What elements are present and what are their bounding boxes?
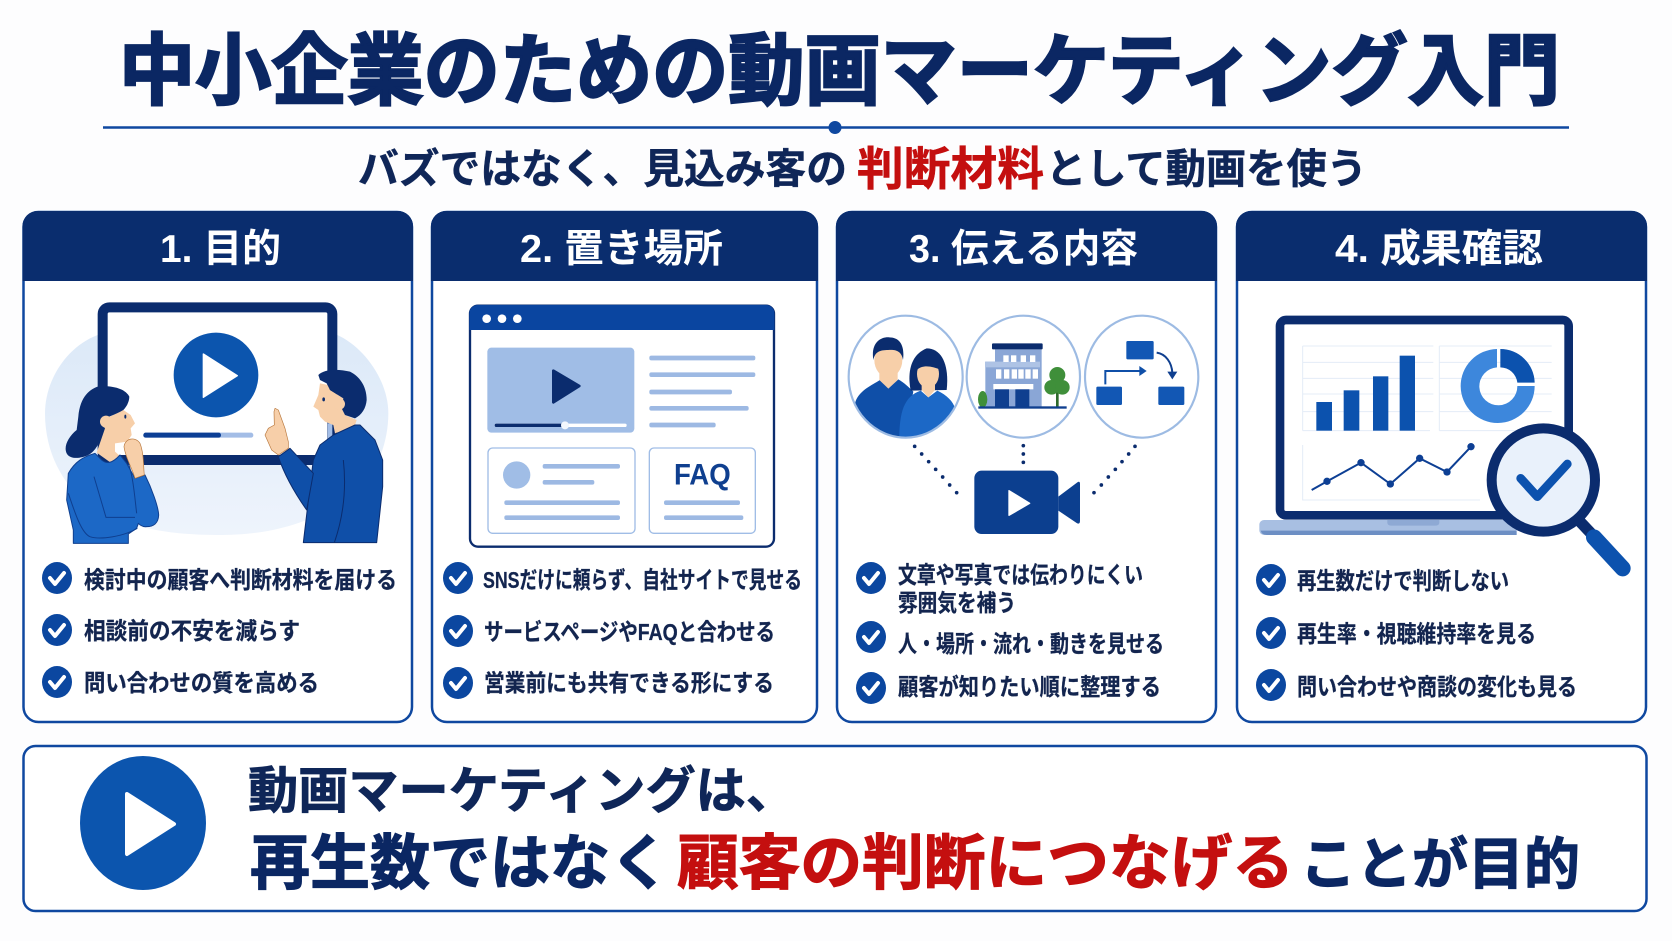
circle: people: [849, 316, 963, 440]
illustration: web page with video and FAQ: [469, 305, 774, 547]
bullet text: 人・場所・流れ・動きを見せる: [898, 631, 1164, 657]
icon: magnifier with check: [1492, 428, 1623, 568]
callout text line 2: ことが目的: [1300, 833, 1580, 896]
check icon: [443, 562, 473, 594]
panel header: [431, 211, 818, 281]
icon: play button: [80, 756, 206, 890]
panel heading: 2. 置き場所: [520, 228, 723, 271]
panel: 3. 伝える内容: [836, 211, 1217, 722]
line chart: [1303, 443, 1480, 500]
circle: building: [967, 316, 1080, 438]
bullet text: [898, 562, 1143, 616]
check icon: [42, 614, 72, 646]
callout text line 1: 動画マーケティングは、: [248, 763, 796, 819]
illustration: couple watching video: [45, 307, 388, 543]
check icon: [443, 667, 473, 699]
bullet text: 再生数だけで判断しない: [1297, 568, 1509, 594]
check icon: [42, 562, 72, 594]
bullet text: サービスページやFAQと合わせる: [484, 619, 775, 645]
bullet text: 営業前にも共有できる形にする: [484, 670, 774, 696]
woman: [66, 386, 159, 543]
bullet text: 相談前の不安を減らす: [84, 618, 300, 644]
panel header: [1236, 211, 1647, 281]
circle: flow chart: [1085, 316, 1198, 438]
check icon: [856, 672, 886, 704]
bullet text: 問い合わせの質を高める: [84, 670, 319, 696]
panel: 4. 成果確認: [1236, 211, 1647, 722]
icon: video camera: [974, 471, 1080, 534]
panel header: [836, 211, 1217, 281]
check icon: [1256, 669, 1286, 701]
bullet text: SNSだけに頼らず、自社サイトで見せる: [483, 567, 802, 593]
callout text line 2: 再生数ではなく: [250, 830, 670, 897]
bullet list: [443, 562, 802, 699]
bar chart: [1303, 346, 1433, 431]
panel heading: 4. 成果確認: [1335, 228, 1543, 271]
title: 中小企業のための動画マーケティング入門: [119, 27, 1560, 115]
subtitle: 判断材料: [857, 143, 1044, 195]
check icon: [42, 666, 72, 698]
bullet list: [1256, 564, 1577, 701]
panel heading: 1. 目的: [160, 228, 281, 271]
check icon: [443, 615, 473, 647]
check icon: [856, 562, 886, 594]
bullet text: 検討中の顧客へ判断材料を届ける: [84, 567, 397, 593]
bullet text: 問い合わせや商談の変化も見る: [1297, 674, 1577, 700]
callout text line 2: [250, 830, 1580, 897]
bullet text: 文章や写真では伝わりにくい: [898, 562, 1143, 588]
bullet list: [42, 562, 397, 698]
check icon: [856, 621, 886, 653]
illustration: laptop analytics and magnifier: [1259, 320, 1623, 568]
subtitle: バズではなく、見込み客の: [358, 146, 847, 192]
callout: conclusion: [24, 746, 1646, 911]
man: [265, 370, 383, 543]
title rule with dot: [103, 121, 1569, 134]
panel: 1. 目的: [22, 211, 413, 722]
illustration: web page with video and FAQ: FAQ: [674, 459, 731, 492]
callout text line 2: 顧客の判断につなげる: [677, 830, 1294, 897]
panel heading: 3. 伝える内容: [909, 228, 1138, 271]
bullet text: 再生率・視聴維持率を見る: [1297, 621, 1536, 647]
check icon: [1256, 564, 1286, 596]
panel: 2. 置き場所: [431, 211, 818, 722]
bullet list: [856, 562, 1164, 704]
check icon: [1256, 617, 1286, 649]
dotted connectors: [913, 444, 1137, 494]
panel header: [22, 211, 413, 281]
subtitle: として動画を使う: [1046, 146, 1367, 192]
illustration: people, place and flow into a video camera: [849, 316, 1198, 534]
bullet text: 顧客が知りたい順に整理する: [898, 673, 1161, 700]
bullet text: 雰囲気を補う: [898, 590, 1016, 616]
subtitle: [358, 143, 1367, 195]
donut chart: [1439, 346, 1552, 431]
